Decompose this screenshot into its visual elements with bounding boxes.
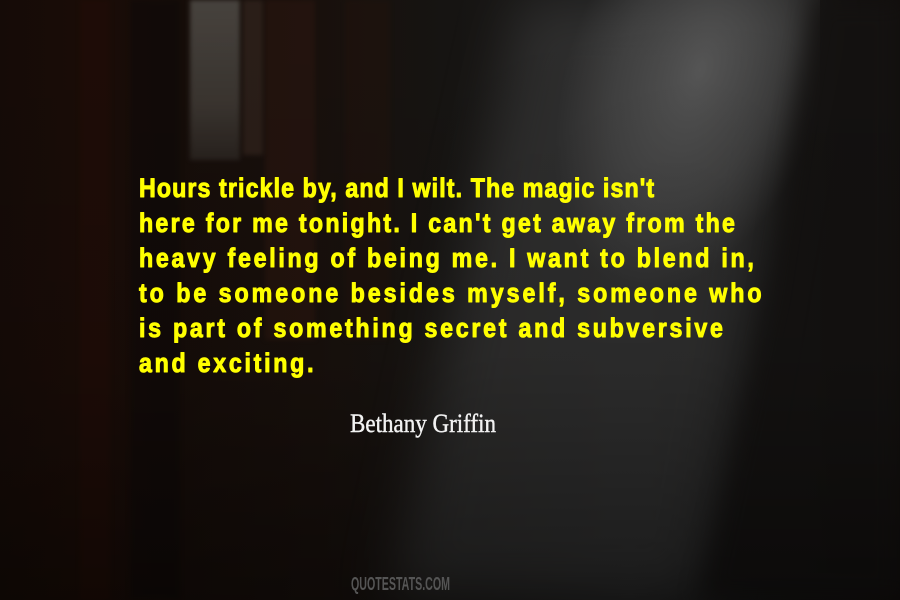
site credit: QUOTESTATS.COM <box>351 574 450 594</box>
quote text: here for me tonight. I can't get away from the <box>139 208 735 238</box>
quote text <box>139 173 762 378</box>
quote text: to be someone besides myself, someone who <box>139 278 762 308</box>
quote text: heavy feeling of being me. I want to blend in, <box>139 243 754 273</box>
quote text: and exciting. <box>139 348 314 378</box>
quote text: is part of something secret and subversive <box>139 313 723 343</box>
author name: Bethany Griffin <box>350 409 496 438</box>
quote text: Hours trickle by, and I wilt. The magic isn't <box>139 173 655 203</box>
